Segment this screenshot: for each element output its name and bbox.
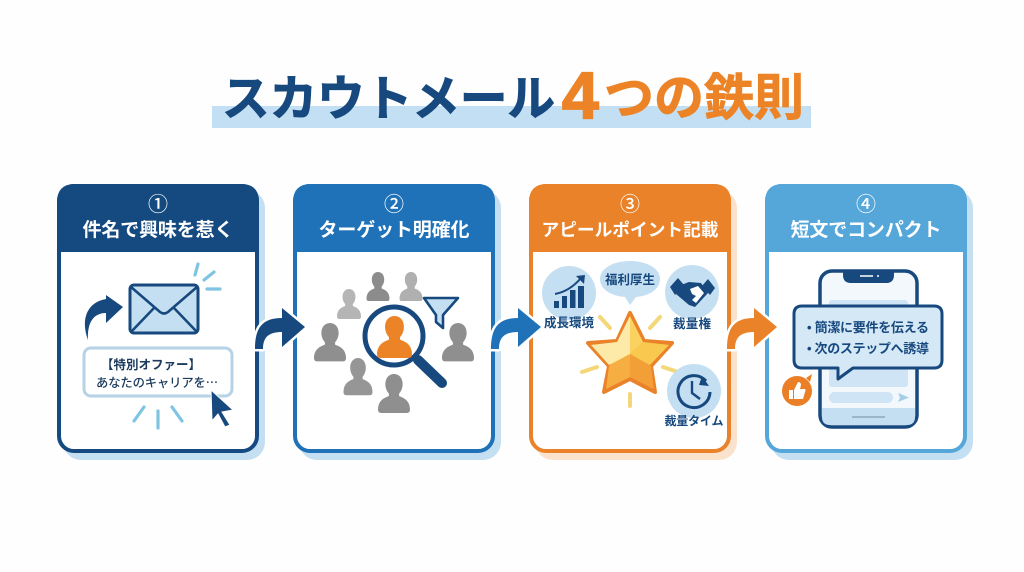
- click rays: [134, 407, 182, 428]
- icon: clock: [664, 364, 724, 428]
- icon: curved arrow to envelope: [85, 295, 123, 340]
- panel 1 header: 件名で興味を惹く: [82, 219, 234, 241]
- icon: envelope: [130, 264, 220, 333]
- icon: growth chart: [542, 266, 596, 330]
- icon: mouse cursor: [211, 390, 233, 427]
- subject line box: [84, 348, 232, 396]
- panel 2 header: ターゲット明確化: [318, 219, 470, 241]
- panel 2 header: [293, 184, 495, 252]
- title: 4: [562, 58, 599, 132]
- arrow: step 2 to 3: [491, 308, 541, 349]
- subject line box: 【特別オファー】: [101, 357, 201, 372]
- icon: thumbs up: [782, 374, 812, 406]
- speech bubble: benefits: 福利厚生: [605, 272, 655, 287]
- icon: handshake: [665, 265, 719, 331]
- panel 2 header: ②: [384, 188, 404, 217]
- panel 3 header: [529, 184, 731, 252]
- panel 3: appeal points: [529, 184, 737, 460]
- panel 3 header: アピールポイント記載: [542, 219, 719, 240]
- panel 4 header: 短文でコンパクト: [790, 219, 942, 241]
- star rays: [582, 317, 678, 406]
- icon: star: [588, 313, 672, 392]
- panel 4 header: [765, 184, 967, 252]
- panel 4: short and compact: [765, 184, 973, 460]
- title: スカウトメール: [222, 73, 555, 126]
- panel 1 header: [57, 184, 259, 252]
- icon: magnifying glass with target person: [365, 307, 442, 383]
- panel 2: clear target: [293, 184, 501, 460]
- panel 1: subject line: [57, 184, 265, 460]
- callout: key points: • 簡潔に要件を伝える: [807, 320, 929, 335]
- icon: clock: 裁量タイム: [664, 413, 724, 428]
- icon: growth chart: 成長環境: [544, 315, 594, 330]
- callout: key points: • 次のステップへ誘導: [807, 341, 929, 356]
- panel 3 header: ③: [620, 188, 640, 217]
- icon: smartphone: [820, 271, 917, 427]
- panel 1 header: ①: [148, 188, 168, 217]
- title: [212, 58, 811, 132]
- icon: crowd of people: [314, 272, 474, 413]
- arrow: step 1 to 2: [255, 308, 305, 349]
- subject line box: あなたのキャリアを…: [96, 373, 218, 391]
- title: つの鉄則: [604, 70, 804, 126]
- speech bubble: benefits: [600, 261, 660, 305]
- icon: funnel: [424, 298, 458, 328]
- arrow: step 3 to 4: [727, 308, 777, 349]
- callout: key points: [794, 306, 942, 379]
- panel 4 header: ④: [856, 188, 876, 217]
- icon: handshake: 裁量権: [673, 316, 711, 331]
